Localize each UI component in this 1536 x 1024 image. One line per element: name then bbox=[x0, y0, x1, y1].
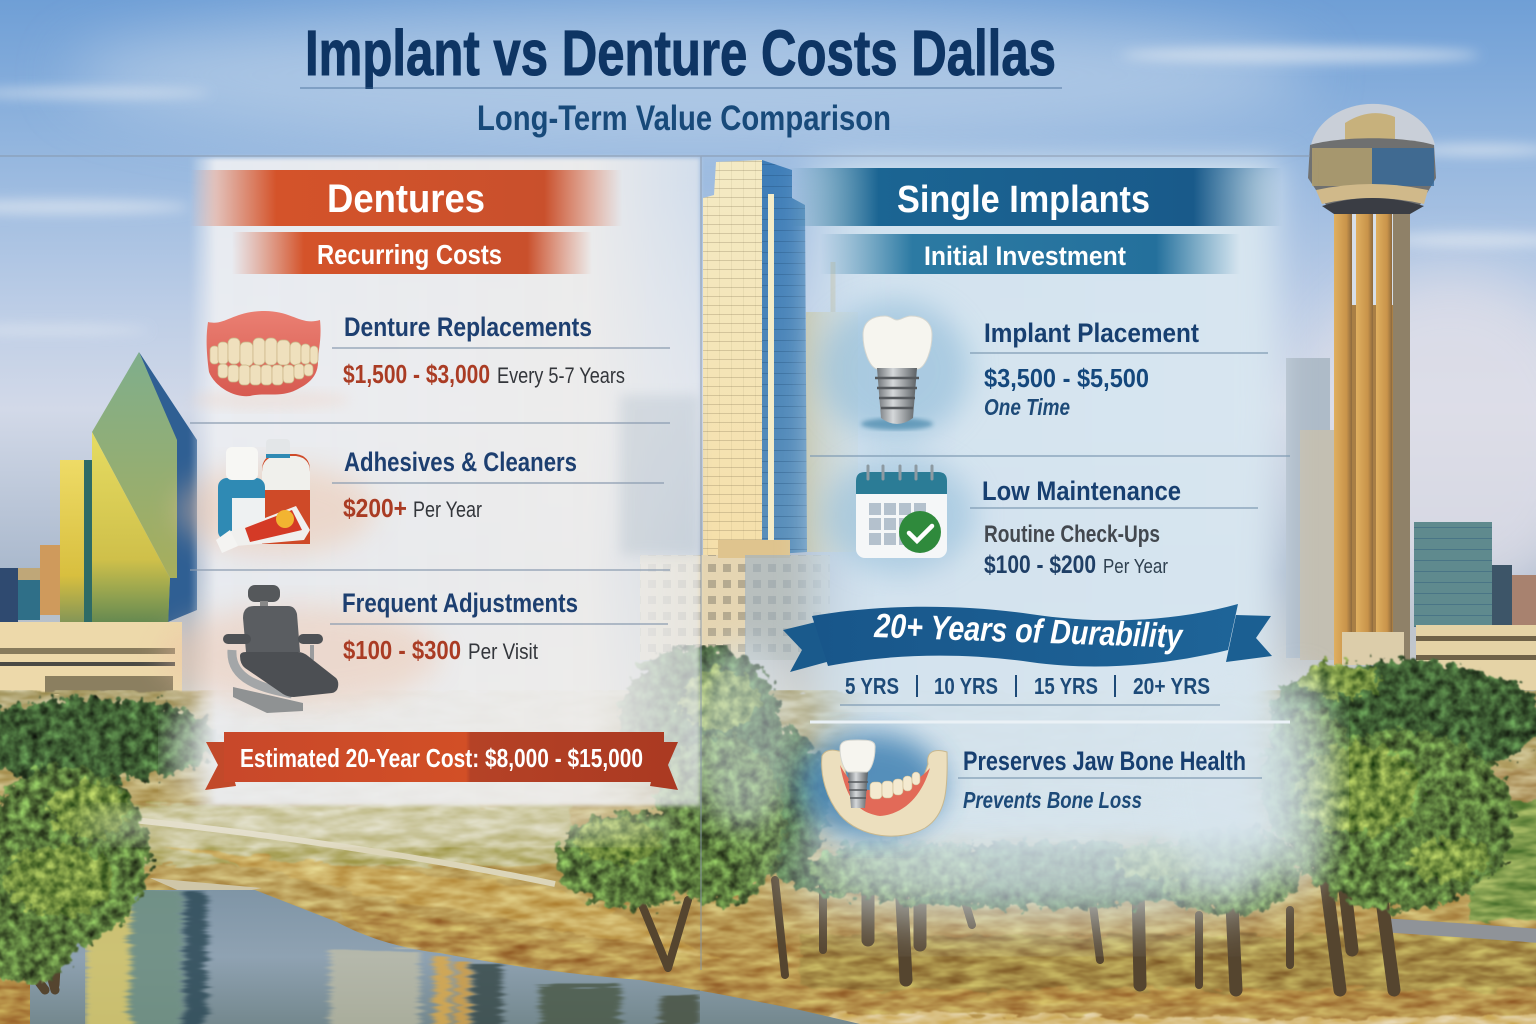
banner: 20+ years of durability: 20+ Years of Durability bbox=[873, 607, 1185, 656]
text: low maintenance: Per Year bbox=[1103, 556, 1168, 578]
callout: estimated 20-year cost: Estimated 20-Year Cost: $8,000 - $15,000 bbox=[240, 743, 643, 773]
text: implant placement: Implant Placement bbox=[984, 318, 1199, 348]
heading: dentures: Dentures bbox=[327, 177, 485, 221]
text: low maintenance bbox=[970, 476, 1258, 579]
background: trees bbox=[0, 640, 1536, 990]
text: denture replacements: Every 5-7 Years bbox=[497, 363, 625, 388]
subheading: initial investment bbox=[820, 234, 1240, 274]
column divider bbox=[0, 156, 1310, 970]
text: adhesives and cleaners: $200+ bbox=[343, 493, 407, 523]
panel: single implants backdrop bbox=[780, 160, 1300, 918]
text: adhesives and cleaners bbox=[343, 447, 577, 523]
text: preserves jaw bone health bbox=[958, 746, 1262, 813]
callout: estimated 20-year cost bbox=[205, 732, 678, 790]
timeline: years: 15 YRS bbox=[1034, 673, 1098, 699]
text: low maintenance: $100 - $200 bbox=[984, 551, 1096, 579]
text: denture replacements: Denture Replacements bbox=[344, 312, 592, 342]
text: implant placement: One Time bbox=[984, 394, 1070, 420]
text: frequent adjustments bbox=[330, 588, 668, 665]
text: frequent adjustments: Frequent Adjustments bbox=[342, 588, 578, 618]
text: implant placement bbox=[970, 318, 1268, 420]
icon: dentures bbox=[207, 311, 321, 396]
panel: dentures column bbox=[190, 170, 678, 790]
timeline: years: 20+ YRS bbox=[1133, 673, 1210, 699]
icon: calendar with check bbox=[856, 466, 947, 558]
text: denture replacements: $1,500 - $3,000 bbox=[343, 359, 490, 389]
text: adhesives and cleaners: Per Year bbox=[413, 497, 482, 522]
background: Reunion Tower bbox=[1308, 104, 1436, 665]
subheading: recurring costs bbox=[232, 232, 592, 274]
background: central skyscraper bbox=[640, 160, 858, 660]
icon: implant bbox=[861, 316, 933, 430]
icon: dental chair bbox=[223, 585, 338, 713]
subheading: recurring costs: Recurring Costs bbox=[317, 239, 502, 270]
text: low maintenance: Low Maintenance bbox=[982, 476, 1181, 506]
panel: single implants column bbox=[783, 168, 1290, 836]
banner: 20+ years of durability bbox=[783, 604, 1272, 672]
subtitle: Long-Term Value Comparison bbox=[477, 99, 891, 138]
panel: dentures backdrop bbox=[160, 158, 700, 806]
background: right skyline bbox=[1286, 358, 1536, 690]
heading: dentures bbox=[190, 170, 622, 226]
text: denture replacements bbox=[332, 312, 670, 389]
timeline: years bbox=[840, 673, 1220, 705]
heading: single implants: Single Implants bbox=[897, 179, 1150, 221]
subheading: initial investment: Initial Investment bbox=[924, 241, 1126, 271]
text: frequent adjustments: $100 - $300 bbox=[343, 635, 461, 665]
text: low maintenance: Routine Check-Ups bbox=[984, 521, 1160, 548]
background: ground and river bbox=[0, 690, 1536, 1024]
timeline: years: 5 YRS bbox=[845, 673, 899, 699]
icon: jaw with implant bbox=[822, 740, 947, 836]
timeline: years: 10 YRS bbox=[934, 673, 998, 699]
text: frequent adjustments: Per Visit bbox=[468, 639, 538, 664]
text: preserves jaw bone health: Prevents Bone Loss bbox=[963, 787, 1142, 813]
icon: adhesive bottles and tube bbox=[216, 439, 310, 553]
text: preserves jaw bone health: Preserves Jaw Bone Health bbox=[963, 746, 1246, 776]
text: adhesives and cleaners: Adhesives & Cleaners bbox=[344, 447, 577, 477]
background: left skyline bbox=[0, 352, 197, 696]
text: implant placement: $3,500 - $5,500 bbox=[984, 363, 1149, 393]
title: Implant vs Denture Costs Dallas bbox=[305, 17, 1056, 89]
heading: single implants bbox=[790, 168, 1282, 226]
